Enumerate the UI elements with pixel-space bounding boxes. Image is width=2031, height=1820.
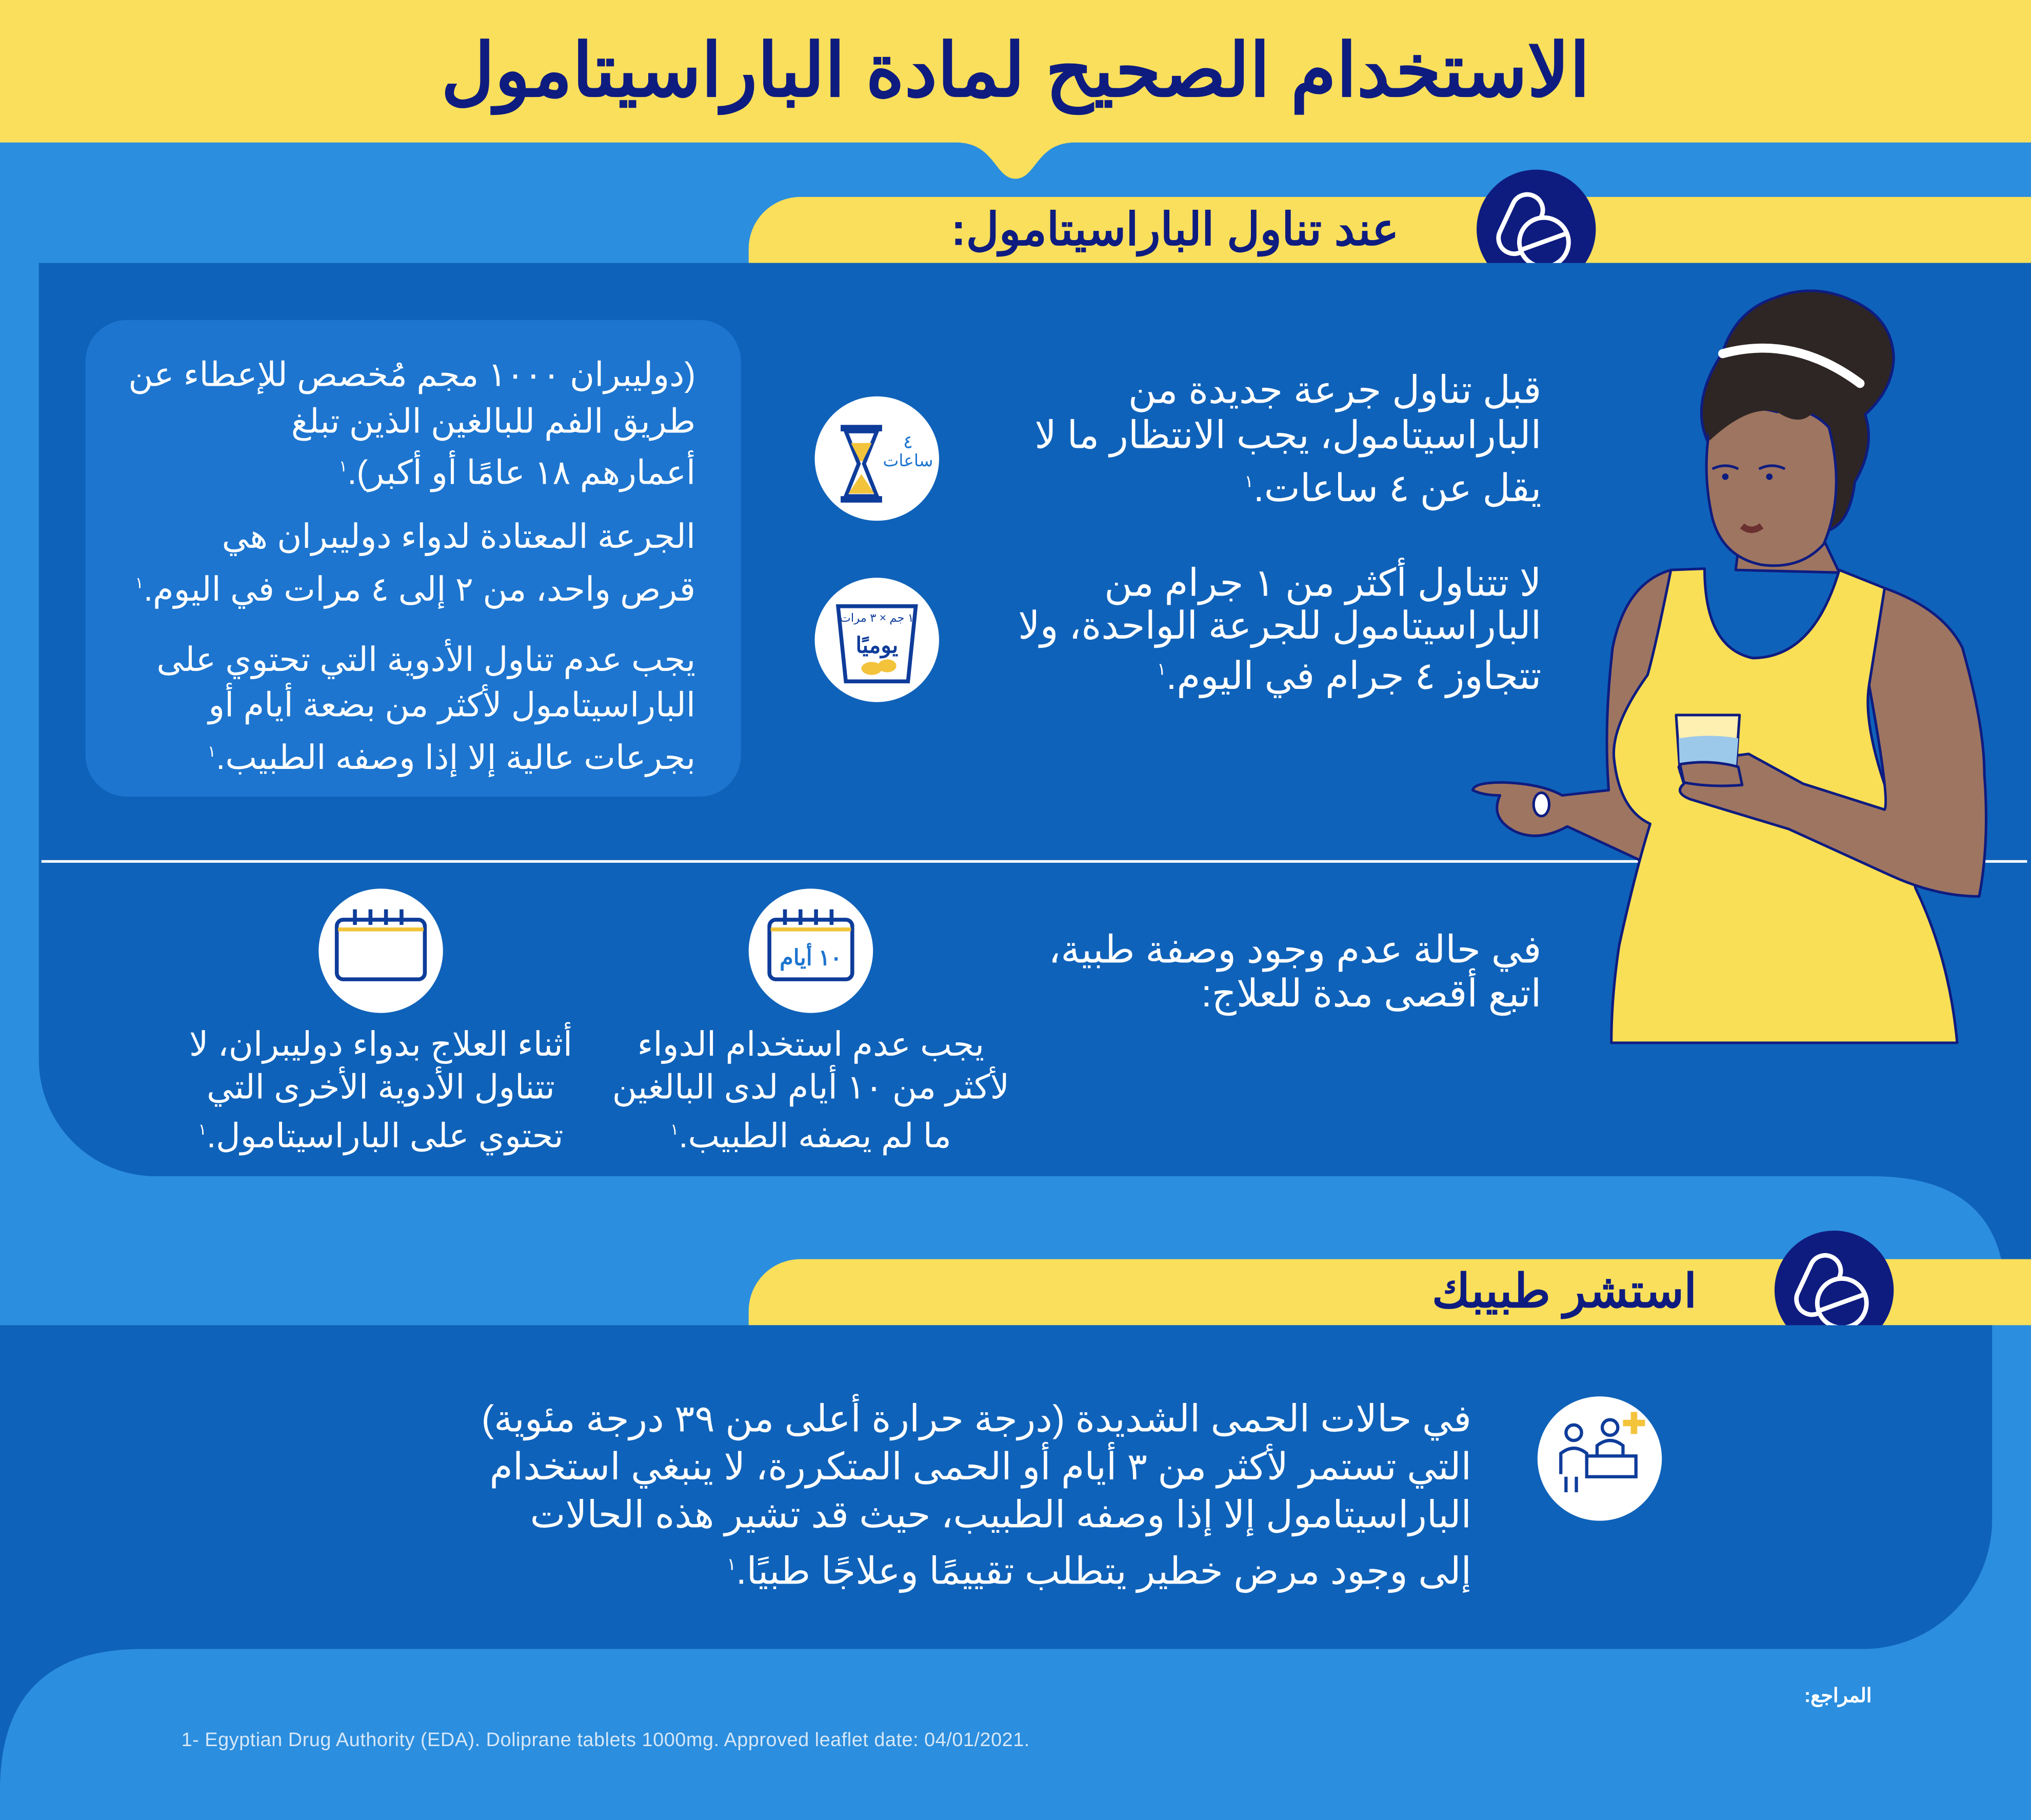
icon: calendar blank xyxy=(318,888,443,1013)
icon: calendar 10 days: ١٠ أيام xyxy=(780,942,842,971)
text block: 10 days: يجب عدم استخدام الدواء xyxy=(638,1024,984,1063)
section 2 heading: استشر طبيبك xyxy=(1432,1264,1697,1317)
text block: inner box: قرص واحد، من ٢ إلى ٤ مرات في اليوم.١ يجب عدم تناول الأدوية التي تحتوي على xyxy=(135,569,695,679)
text block: inner box: بجرعات عالية إلا إذا وصفه الطبيب.١ xyxy=(208,738,695,777)
text block: inner box: الباراسيتامول لأكثر من بضعة أيام أو xyxy=(208,686,695,724)
text block: 10 days: لأكثر من ١٠ أيام لدى البالغين xyxy=(612,1067,1009,1106)
icon: pills section 2 xyxy=(1775,1231,1894,1350)
text block: wait 4 hours: يقل عن ٤ ساعات.١ xyxy=(1244,467,1541,510)
icon: hourglass 4 hours: ساعات xyxy=(883,451,933,470)
text block: max dose: الباراسيتامول للجرعة الواحدة، ولا xyxy=(1018,605,1541,648)
text block: no other paracetamol: أثناء العلاج بدواء دوليبران، لا xyxy=(189,1024,572,1063)
panel: section 1 xyxy=(39,263,2031,1176)
references heading: المراجع: xyxy=(1804,1685,1871,1707)
text block: 10 days: ما لم يصفه الطبيب.١ xyxy=(670,1116,951,1155)
icon: pills section 1 xyxy=(1477,170,1596,289)
text block: inner box: (دوليبران ١٠٠٠ مجم مُخصص للإعطاء عن xyxy=(128,355,695,394)
icon: daily dose cup xyxy=(815,578,939,702)
panel: inner info box xyxy=(86,320,741,797)
text block: inner box: طريق الفم للبالغين الذين تبلغ xyxy=(291,401,695,440)
text block: wait 4 hours: قبل تناول جرعة جديدة من xyxy=(1128,369,1541,412)
icon: hourglass 4 hours xyxy=(815,397,939,521)
icon: daily dose cup: يوميًا xyxy=(855,634,898,659)
text block: no prescription: اتبع أقصى مدة للعلاج: xyxy=(1201,973,1541,1016)
text block: fever: إلى وجود مرض خطير يتطلب تقييمًا وعلاجًا طبيًا.١ xyxy=(727,1551,1471,1593)
text block: inner box xyxy=(128,355,695,777)
text block: fever: في حالات الحمى الشديدة (درجة حرارة أعلى من ٣٩ درجة مئوية) xyxy=(482,1399,1471,1440)
section 1 header bar xyxy=(749,197,2031,263)
text block: no prescription: في حالة عدم وجود وصفة طبية، xyxy=(1048,929,1541,972)
text block: inner box: أعمارهم ١٨ عامًا أو أكبر).١ الجرعة المعتادة لدواء دوليبران هي xyxy=(222,453,695,556)
text block: fever: الباراسيتامول إلا إذا وصفه الطبيب، حيث قد تشير هذه الحالات xyxy=(530,1495,1471,1536)
text block: 10 days xyxy=(612,1024,1009,1155)
text block: max dose: لا تتناول أكثر من ١ جرام من xyxy=(1104,562,1541,605)
references text: 1- Egyptian Drug Authority (EDA). Doliprane tablets 1000mg. Approved leaflet date: 04/01/2021. xyxy=(182,1729,1030,1751)
icon: calendar 10 days xyxy=(749,888,873,1013)
text block: wait 4 hours: الباراسيتامول، يجب الانتظار ما لا xyxy=(1034,414,1541,457)
text block: no prescription xyxy=(1048,929,1541,1016)
top yellow band xyxy=(0,0,2031,179)
panel: section 2 xyxy=(0,1325,1992,1649)
text block: fever: التي تستمر لأكثر من ٣ أيام أو الحمى المتكررة، لا ينبغي استخدام xyxy=(490,1447,1471,1489)
illustration: woman with glass xyxy=(1471,289,1987,1044)
text block: max dose: تتجاوز ٤ جرام في اليوم.١ xyxy=(1157,655,1541,698)
section 2 header bar xyxy=(749,1259,2031,1325)
text block: fever xyxy=(482,1394,1471,1593)
title: الاستخدام الصحيح لمادة الباراسيتامول xyxy=(441,30,1590,113)
divider line xyxy=(42,860,2027,863)
icon: daily dose cup: ١ جم × ٣ مرات xyxy=(840,611,914,625)
background curve between panels xyxy=(1875,1176,2031,1259)
text block: no other paracetamol: تحتوي على الباراسيتامول.١ xyxy=(198,1116,563,1155)
section 1 heading: عند تناول الباراسيتامول: xyxy=(951,205,1399,255)
text block: max dose xyxy=(1018,558,1541,699)
text block: no other paracetamol xyxy=(189,1022,572,1155)
icon: doctor consultation xyxy=(1538,1396,1662,1521)
icon: hourglass 4 hours: ٤ xyxy=(903,432,913,452)
text block: no other paracetamol: تتناول الأدوية الأخرى التي xyxy=(207,1067,555,1106)
text block: wait 4 hours xyxy=(1034,369,1541,511)
footer background xyxy=(0,1649,1863,1787)
